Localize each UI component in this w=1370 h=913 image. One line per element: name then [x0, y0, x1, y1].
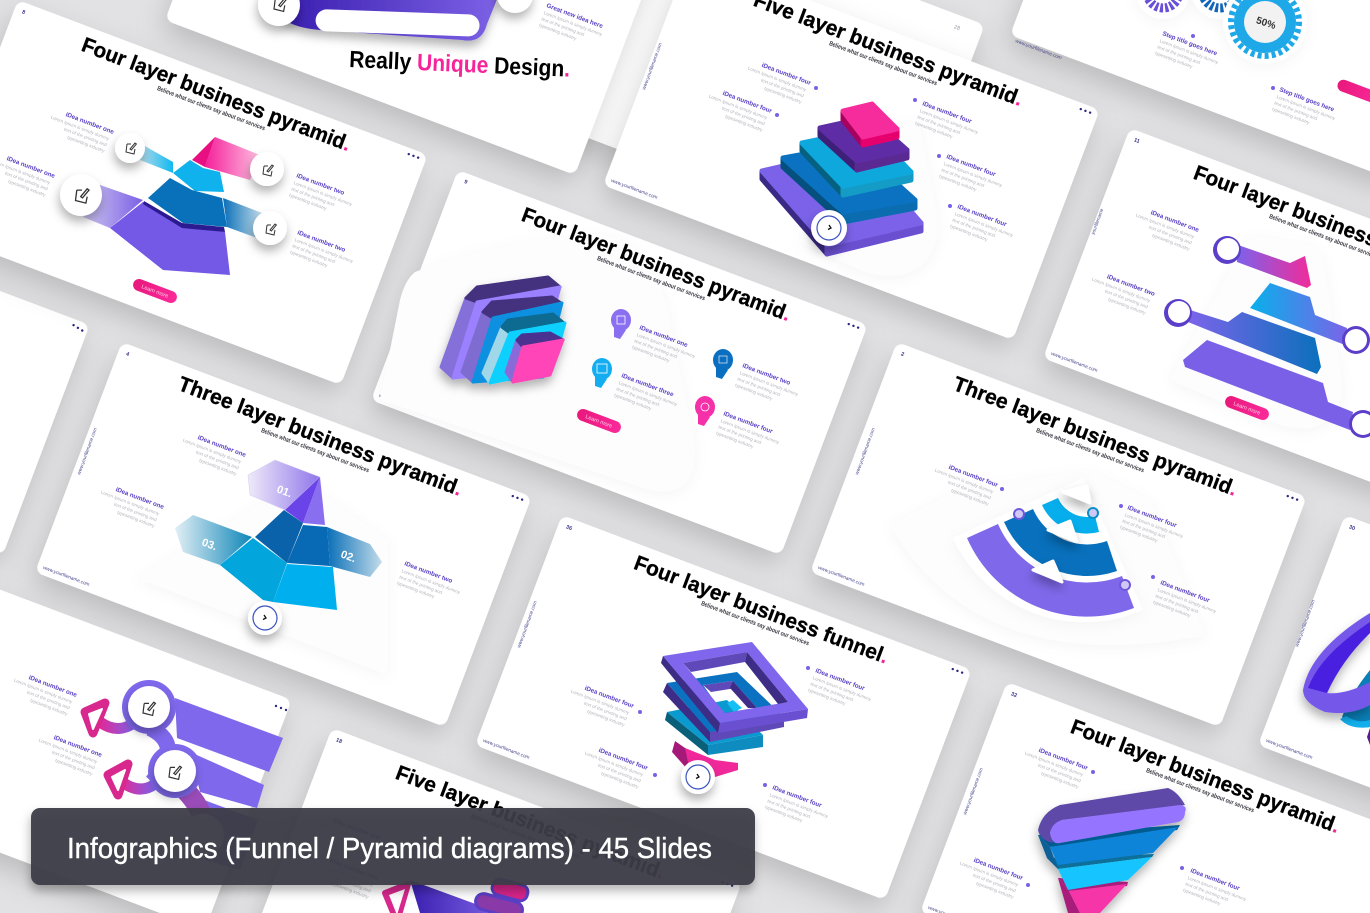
idea: four: Lorem Ipsum is simply dummy	[720, 418, 780, 445]
idea: one upper: Lorem Ipsum is simply dummy	[13, 678, 74, 704]
three layer diagram: 03.	[200, 537, 218, 553]
idea: one upper: iDea number one	[64, 111, 115, 136]
idea: two lower: text of the printing and	[292, 243, 336, 264]
button: learn more: Learn more	[584, 414, 613, 430]
slide: three layer pyramid 4: www.yourfilename.com	[76, 427, 99, 476]
layered pyramid	[762, 104, 921, 254]
slide: four layer funnel 36: 36	[565, 524, 573, 532]
idea: four a: typesetting industry	[763, 86, 803, 105]
slide: four layer pyramid 11 right	[1043, 128, 1370, 513]
idea: four c: typesetting industry	[975, 881, 1015, 900]
idea: one lower: text of the printing and	[113, 502, 158, 522]
idea: four: text of the printing and	[718, 424, 762, 445]
idea: one: Lorem Ipsum is simply dummy	[636, 332, 696, 359]
idea: four a: Lorem Ipsum is simply dummy	[1024, 751, 1085, 777]
slide: four layer pyramid 32: Believe what our clients say about our services	[1145, 767, 1255, 814]
purple pill	[258, 0, 533, 41]
purple top frame	[661, 642, 808, 733]
idea: two upper	[288, 172, 356, 219]
idea: two lower: iDea number two	[296, 229, 346, 254]
pyramid diagram	[60, 133, 287, 275]
idea: four a	[1020, 743, 1089, 790]
idea: four	[715, 410, 783, 457]
idea: four a	[807, 667, 875, 714]
slide: four layer pyramid 32	[920, 682, 1370, 913]
idea: four right upper: Lorem Ipsum is simply dummy	[1124, 512, 1184, 539]
button: learn more: Learn more	[1232, 401, 1261, 417]
idea: two upper: text of the printing and	[291, 186, 335, 207]
idea text: typesetting industry	[538, 22, 578, 41]
step two: typesetting industry	[1271, 106, 1311, 125]
idea: four e: Lorem Ipsum is simply dummy	[954, 211, 1014, 238]
step one: typesetting industry	[1154, 50, 1194, 69]
slide: four layer pyramid 8	[0, 0, 428, 385]
idea: two: text of the printing and	[1104, 289, 1149, 309]
three layer diagram: 02.	[339, 549, 357, 565]
idea: four b: Lorem Ipsum is simply dummy	[708, 94, 769, 120]
idea: four b: typesetting industry	[724, 114, 764, 133]
idea: one: typesetting industry	[1151, 233, 1191, 252]
idea: one upper: typesetting industry	[66, 135, 106, 154]
idea: four right upper: typesetting industry	[1119, 524, 1159, 543]
idea: four c: Lorem Ipsum is simply dummy	[919, 108, 979, 135]
three layer diagram: 01.	[275, 484, 293, 500]
ring diagram	[1303, 613, 1370, 745]
slide: five layer pyramid top: Believe what our clients say about our services	[828, 40, 938, 87]
idea: one upper: typesetting industry	[198, 458, 238, 477]
pink base layer	[672, 741, 738, 777]
button: learn more	[575, 407, 623, 435]
slide: step title gears top right	[1010, 0, 1370, 190]
heading: Really Unique Design: Really Unique Design.	[349, 46, 571, 82]
inverted pyramid diagram	[1038, 788, 1186, 913]
slide: four layer pyramid 8: 8	[21, 9, 26, 16]
idea: four right upper: iDea number four	[1126, 504, 1178, 529]
step two: Step title goes here	[1278, 86, 1336, 114]
icon: bulb blue	[713, 349, 733, 379]
idea: one upper: Lorem Ipsum is simply dummy	[50, 115, 111, 141]
idea: two	[310, 853, 379, 900]
idea: four d: typesetting industry	[938, 173, 978, 192]
idea: one	[1131, 205, 1200, 252]
idea: four c	[580, 743, 649, 790]
idea: one: typesetting industry	[631, 344, 671, 363]
step two: text of the printing and	[1274, 100, 1318, 121]
idea: four right lower: iDea number four	[1159, 579, 1211, 604]
idea: four e: iDea number four	[956, 203, 1008, 228]
slide: really unique design	[165, 0, 662, 175]
idea: four right lower: typesetting industry	[1152, 599, 1192, 618]
step two	[1271, 86, 1339, 133]
slide: four layer pyramid 9: 9	[463, 179, 468, 186]
idea: one: text of the printing and	[330, 833, 375, 853]
idea: four a: typesetting industry	[807, 687, 847, 706]
idea: one	[631, 324, 699, 371]
purple bands and circles	[85, 680, 283, 870]
idea: two	[734, 362, 802, 409]
idea: four d: typesetting industry	[764, 804, 804, 823]
idea: four c: text of the printing and	[917, 114, 961, 135]
idea: four d	[764, 784, 832, 831]
idea: two: text of the printing and	[737, 376, 781, 397]
slide: four layer funnel 36: www.yourfilename.com	[482, 738, 530, 761]
idea: four b: text of the printing and	[1185, 881, 1229, 902]
idea: four c: iDea number four	[598, 747, 649, 772]
idea: four right lower: text of the printing and	[1155, 593, 1199, 614]
step one	[1154, 30, 1222, 77]
idea: four right lower	[1152, 579, 1220, 626]
clock icon	[811, 210, 847, 246]
idea: four d: iDea number four	[771, 784, 823, 809]
slide: five layer pyramid 18: Believe what our clients say about our services	[470, 813, 580, 860]
idea: one lower	[34, 730, 103, 777]
idea: one lower	[96, 482, 165, 529]
slide: three layer pyramid 4: www.yourfilename.com	[42, 565, 90, 588]
idea: four b: iDea number four	[584, 685, 635, 710]
slide: four layer pyramid 11 right: yourfilename	[1090, 208, 1105, 236]
idea: two: Lorem Ipsum is simply dummy	[1091, 277, 1152, 303]
idea: four b: text of the printing and	[583, 701, 628, 721]
stacked layers diagram	[441, 277, 565, 383]
idea: two lower: Lorem Ipsum is simply dummy	[294, 237, 354, 264]
idea text: Great new idea here	[545, 2, 604, 30]
slide: four layer pyramid 11 right: www.yourfilename.com	[1050, 351, 1098, 374]
slide: three layer pyramid 4	[35, 342, 532, 727]
slide: page 30 right: www.yourfilename.com	[1294, 599, 1317, 648]
idea: four a: typesetting industry	[1040, 771, 1080, 790]
idea: four e	[949, 203, 1017, 250]
idea: one: Lorem Ipsum is simply dummy	[317, 821, 378, 847]
slide: three layer pyramid 2: www.yourfilename.com	[854, 427, 877, 476]
idea: one upper: typesetting industry	[29, 698, 69, 717]
slide: three layer pyramid 2: 2	[900, 351, 905, 358]
idea: four d: iDea number four	[945, 153, 997, 178]
slide: three layer pyramid 2: Believe what our clients say about our services	[1035, 427, 1145, 474]
idea: one lower: iDea number one	[5, 155, 56, 180]
idea: one lower: typesetting industry	[7, 179, 47, 198]
idea: four a: text of the printing and	[760, 78, 805, 98]
step one: Lorem Ipsum is simply dummy	[1159, 38, 1219, 65]
idea: four c: Lorem Ipsum is simply dummy	[584, 751, 645, 777]
idea: four d: text of the printing and	[767, 798, 811, 819]
slide: five layer pyramid top: www.yourfilename.com	[610, 178, 658, 201]
slide: three layer pyramid 4: Believe what our clients say about our services	[260, 427, 370, 474]
idea: three: Lorem Ipsum is simply dummy	[618, 380, 678, 407]
idea text: Lorem Ipsum is simply dummy	[543, 10, 603, 37]
fan diagram	[953, 478, 1143, 622]
idea: one upper: Lorem Ipsum is simply dummy	[182, 438, 243, 464]
idea: four a: text of the printing and	[1037, 763, 1082, 783]
slide: four layer pyramid 32: 32	[1010, 691, 1018, 699]
idea: two: Lorem Ipsum is simply dummy	[739, 370, 799, 397]
idea: four c: typesetting industry	[914, 120, 954, 139]
idea: two lower	[289, 229, 357, 276]
idea: one lower: iDea number one	[52, 734, 103, 759]
idea: four left: text of the printing and	[947, 480, 992, 500]
caption banner	[31, 808, 755, 885]
three layer diagram	[175, 460, 382, 635]
idea: four left	[930, 460, 999, 507]
idea: four b	[566, 681, 635, 728]
slide: four layer pyramid 8: Believe what our clients say about our services	[156, 85, 266, 132]
slide: four layer pyramid 32: www.yourfilename.com	[962, 767, 985, 816]
idea: two: Lorem Ipsum is simply dummy	[314, 861, 375, 887]
idea: two: typesetting industry	[734, 382, 774, 401]
idea: two: iDea number two	[741, 362, 791, 387]
idea: four a: iDea number four	[761, 62, 812, 87]
slide: four layer pyramid 9	[371, 170, 868, 555]
idea: one lower: Lorem Ipsum is simply dummy	[38, 738, 99, 764]
slide: five layer pyramid 18: 18	[335, 737, 343, 745]
idea: one lower: typesetting industry	[116, 510, 156, 529]
button: learn more	[131, 277, 179, 305]
slide: three layer pyramid 2: Three layer business pyramid.	[950, 373, 1241, 501]
caption text: Infographics (Funnel / Pyramid diagrams) - 45 Slides	[67, 833, 712, 865]
band diagram	[1164, 236, 1370, 438]
gear chart 50%	[1136, 0, 1307, 64]
idea: two: typesetting industry	[396, 580, 436, 599]
idea: four c: iDea number four	[973, 857, 1024, 882]
idea: one: iDea number one	[1149, 209, 1200, 234]
idea: one upper: text of the printing and	[26, 690, 71, 710]
idea: four d: Lorem Ipsum is simply dummy	[769, 792, 829, 819]
slide: four layer pyramid 32: Four layer business pyramid.	[1067, 715, 1343, 838]
pills and triangle	[385, 878, 529, 913]
idea: one upper	[178, 430, 247, 477]
idea: two: text of the printing and	[399, 574, 443, 595]
slide: five layer pyramid 18: Five layer business pyramid.	[392, 761, 668, 884]
button: learn more	[1223, 394, 1271, 422]
slide: four layer funnel 36: Believe what our clients say about our services	[700, 600, 810, 647]
idea: one: text of the printing and	[1148, 225, 1193, 245]
idea: four d: text of the printing and	[941, 167, 985, 188]
idea: four b: typesetting industry	[1182, 887, 1222, 906]
idea: four a	[743, 58, 812, 105]
idea: two upper: typesetting industry	[288, 192, 328, 211]
teal layer	[665, 700, 763, 755]
idea: four b	[1182, 867, 1250, 913]
idea: one lower: text of the printing and	[4, 171, 49, 191]
slide: idea triangles bottom left	[0, 545, 292, 913]
slide: page 30 right: www.yourfilename.com	[1265, 738, 1313, 761]
step one: Step title goes here	[1161, 30, 1219, 58]
idea: four b	[704, 86, 773, 133]
idea: two upper: Lorem Ipsum is simply dummy	[293, 180, 353, 207]
slide: four layer pyramid 11 right: 11	[1133, 137, 1140, 145]
idea: two lower: typesetting industry	[289, 249, 329, 268]
slide: four layer pyramid 9: Believe what our clients say about our services	[596, 255, 706, 302]
idea: two: typesetting industry	[1107, 297, 1147, 316]
idea: four left: Lorem Ipsum is simply dummy	[934, 468, 995, 494]
slide: four layer funnel 36	[475, 515, 972, 900]
idea: four c: typesetting industry	[600, 771, 640, 790]
idea text: text of the printing and	[541, 16, 585, 37]
idea: one: iDea number one	[331, 817, 382, 842]
slide: three layer pyramid 2: www.yourfilename.com	[817, 565, 865, 588]
idea: four c: text of the printing and	[972, 873, 1017, 893]
step two: Lorem Ipsum is simply dummy	[1276, 94, 1336, 121]
idea: four d: Lorem Ipsum is simply dummy	[943, 161, 1003, 188]
slide: four layer funnel 36: www.yourfilename.com	[516, 600, 539, 649]
slide: three layer pyramid 2	[810, 342, 1307, 727]
slide: step title gears top right: www.yourfilename.com	[1014, 38, 1063, 61]
idea: four e: typesetting industry	[949, 223, 989, 242]
idea: one upper: iDea number one	[196, 434, 247, 459]
idea: one upper	[9, 670, 78, 717]
idea: four b: Lorem Ipsum is simply dummy	[1187, 875, 1247, 902]
idea: one upper	[46, 107, 115, 154]
step one: text of the printing and	[1157, 44, 1201, 65]
idea: four c: iDea number four	[921, 100, 973, 125]
idea: four a: Lorem Ipsum is simply dummy	[747, 66, 808, 92]
idea: one upper: text of the printing and	[63, 127, 108, 147]
icon: bulb pink	[695, 396, 715, 426]
icon: bulb purple	[611, 309, 631, 339]
slide: four layer pyramid 9: www.yourfilename.com	[378, 393, 426, 416]
idea: four a: Lorem Ipsum is simply dummy	[812, 675, 872, 702]
idea: two	[1087, 269, 1156, 316]
slide: five layer pyramid top	[603, 0, 1100, 340]
idea: one lower: iDea number one	[114, 486, 165, 511]
idea: four a: iDea number four	[1038, 747, 1089, 772]
idea: one lower: Lorem Ipsum is simply dummy	[100, 490, 161, 516]
idea: two: iDea number two	[1106, 273, 1156, 298]
idea: two upper: iDea number two	[295, 172, 345, 197]
idea: three	[613, 372, 681, 419]
idea: four a: iDea number four	[814, 667, 866, 692]
idea: two	[396, 560, 464, 607]
idea: two: iDea number one	[328, 857, 379, 882]
slide: five layer pyramid 18	[245, 728, 742, 913]
slide: four layer pyramid 8: Four layer business pyramid.	[78, 33, 354, 156]
slide: page 28 top: 28	[953, 24, 961, 32]
idea: one	[313, 813, 382, 860]
slide: four layer funnel 36: Four layer business funnel.	[631, 552, 892, 669]
idea: two: Lorem Ipsum is simply dummy	[401, 568, 461, 595]
idea: one lower	[0, 151, 56, 198]
funnel diagram	[661, 642, 808, 794]
idea: four b: iDea number four	[1189, 867, 1241, 892]
slide: three layer pyramid 4: Three layer business pyramid.	[175, 373, 466, 501]
slide: far left	[0, 170, 90, 555]
idea: four b: typesetting industry	[586, 709, 626, 728]
idea: one upper: text of the printing and	[195, 450, 240, 470]
idea: three: iDea number three	[620, 372, 675, 399]
blue layer	[663, 672, 784, 742]
idea text	[538, 2, 606, 49]
gear chart 50%: 50%	[1255, 15, 1277, 32]
icon: bulb cyan	[592, 358, 612, 388]
idea: one: typesetting industry	[333, 841, 373, 860]
idea: two: iDea number two	[403, 560, 453, 585]
slide: five layer pyramid top: www.yourfilename.com	[641, 42, 664, 91]
idea: four right upper: text of the printing and	[1122, 518, 1166, 539]
idea: four d	[938, 153, 1006, 200]
idea: four left: typesetting industry	[950, 488, 990, 507]
idea: three: text of the printing and	[616, 386, 660, 407]
idea: four right lower: Lorem Ipsum is simply dummy	[1157, 587, 1217, 614]
idea: one: iDea number one	[638, 324, 689, 349]
button: learn more: Learn more	[140, 284, 169, 300]
idea: four b: Lorem Ipsum is simply dummy	[570, 689, 631, 715]
idea: four left: iDea number four	[948, 464, 999, 489]
title: Four layer business pyramid.	[518, 203, 794, 326]
idea: three: typesetting industry	[613, 392, 653, 411]
idea: four: typesetting industry	[715, 430, 755, 449]
idea: four b: text of the printing and	[721, 106, 766, 126]
idea: two: text of the printing and	[327, 873, 372, 893]
idea: one: text of the printing and	[634, 338, 678, 359]
idea: four b: iDea number four	[722, 90, 773, 115]
idea: four a: text of the printing and	[810, 681, 854, 702]
idea: one lower: typesetting industry	[54, 758, 94, 777]
idea: four e: text of the printing and	[952, 217, 996, 238]
slide: page 28 top	[488, 0, 985, 255]
idea: four right upper	[1119, 504, 1187, 551]
idea: one: Lorem Ipsum is simply dummy	[1135, 213, 1196, 239]
idea: two: typesetting industry	[330, 881, 370, 900]
slide: page 30 right	[1258, 515, 1370, 900]
idea: four c	[914, 100, 982, 147]
slide: three layer pyramid 4: 4	[125, 351, 131, 358]
idea: one lower: text of the printing and	[51, 750, 96, 770]
idea: four c: text of the printing and	[597, 763, 642, 783]
idea: four c: Lorem Ipsum is simply dummy	[959, 861, 1020, 887]
idea: four c	[955, 853, 1024, 900]
slide: page 30 right: 30	[1348, 524, 1356, 532]
idea: four: iDea number four	[722, 410, 774, 435]
idea: one upper: iDea number one	[27, 674, 78, 699]
